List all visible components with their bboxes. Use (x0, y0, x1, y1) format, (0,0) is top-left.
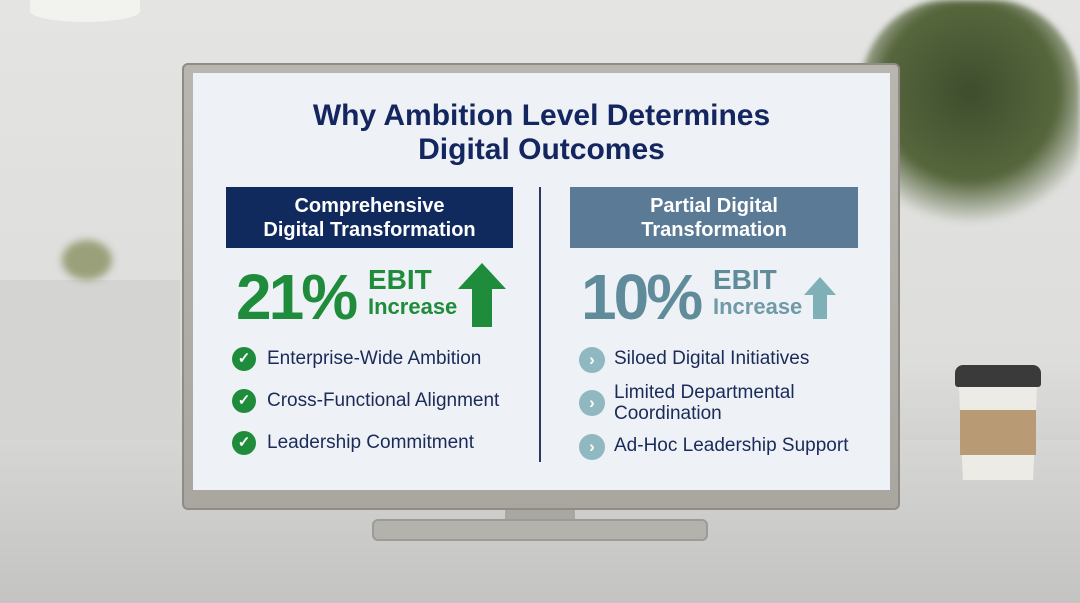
title: Digital Outcomes (418, 133, 665, 166)
divider (539, 187, 541, 462)
icon: coffee cup (955, 365, 1041, 480)
icon: up arrow green (458, 263, 506, 327)
background: table (0, 440, 1080, 603)
list: comprehensive: ✓ (238, 350, 250, 367)
list: comprehensive: Leadership Commitment (267, 432, 474, 453)
header: comprehensive: Comprehensive (294, 195, 445, 217)
stat: 10% EBIT increase: EBIT (713, 264, 777, 295)
panel: comprehensive (226, 187, 513, 455)
list: comprehensive: ✓ (238, 392, 250, 409)
header: comprehensive: Digital Transformation (263, 219, 476, 241)
header: partial: Partial Digital (650, 195, 778, 217)
list: partial (579, 347, 848, 460)
stat: 10% EBIT increase: Increase (713, 294, 802, 319)
panel: partial (570, 187, 858, 460)
list: partial: Ad-Hoc Leadership Support (614, 435, 848, 456)
background: lamp (30, 0, 140, 22)
list: partial: Siloed Digital Initiatives (614, 348, 809, 369)
list: comprehensive (232, 347, 500, 455)
title: Why Ambition Level Determines (313, 99, 770, 132)
stat: 10% EBIT increase (581, 261, 836, 333)
stat: 21% EBIT increase: 21% (236, 261, 355, 333)
stat: 10% EBIT increase: 10% (581, 261, 700, 333)
list: partial: › (589, 393, 595, 412)
list: comprehensive: Cross-Functional Alignment (267, 390, 499, 411)
list: partial: Coordination (614, 403, 722, 424)
title (312, 99, 770, 166)
icon: up arrow teal (804, 277, 836, 319)
list: comprehensive: ✓ (238, 434, 250, 451)
background: plant (860, 0, 1080, 230)
stat: 21% EBIT increase: EBIT (368, 264, 432, 295)
header: partial: Transformation (641, 219, 787, 241)
stat: 21% EBIT increase: Increase (368, 294, 457, 319)
screen (193, 73, 890, 490)
background: wall shelf (0, 280, 180, 440)
monitor stand (372, 510, 708, 541)
list: partial: › (589, 437, 595, 456)
header: comprehensive (226, 187, 513, 248)
header: partial (570, 187, 858, 248)
list: comprehensive: Enterprise-Wide Ambition (267, 348, 481, 369)
stat: 21% EBIT increase (236, 261, 506, 333)
monitor bezel (182, 63, 900, 510)
list: partial: Limited Departmental (614, 382, 795, 403)
background: small plant (62, 240, 112, 280)
list: partial: › (589, 350, 595, 369)
